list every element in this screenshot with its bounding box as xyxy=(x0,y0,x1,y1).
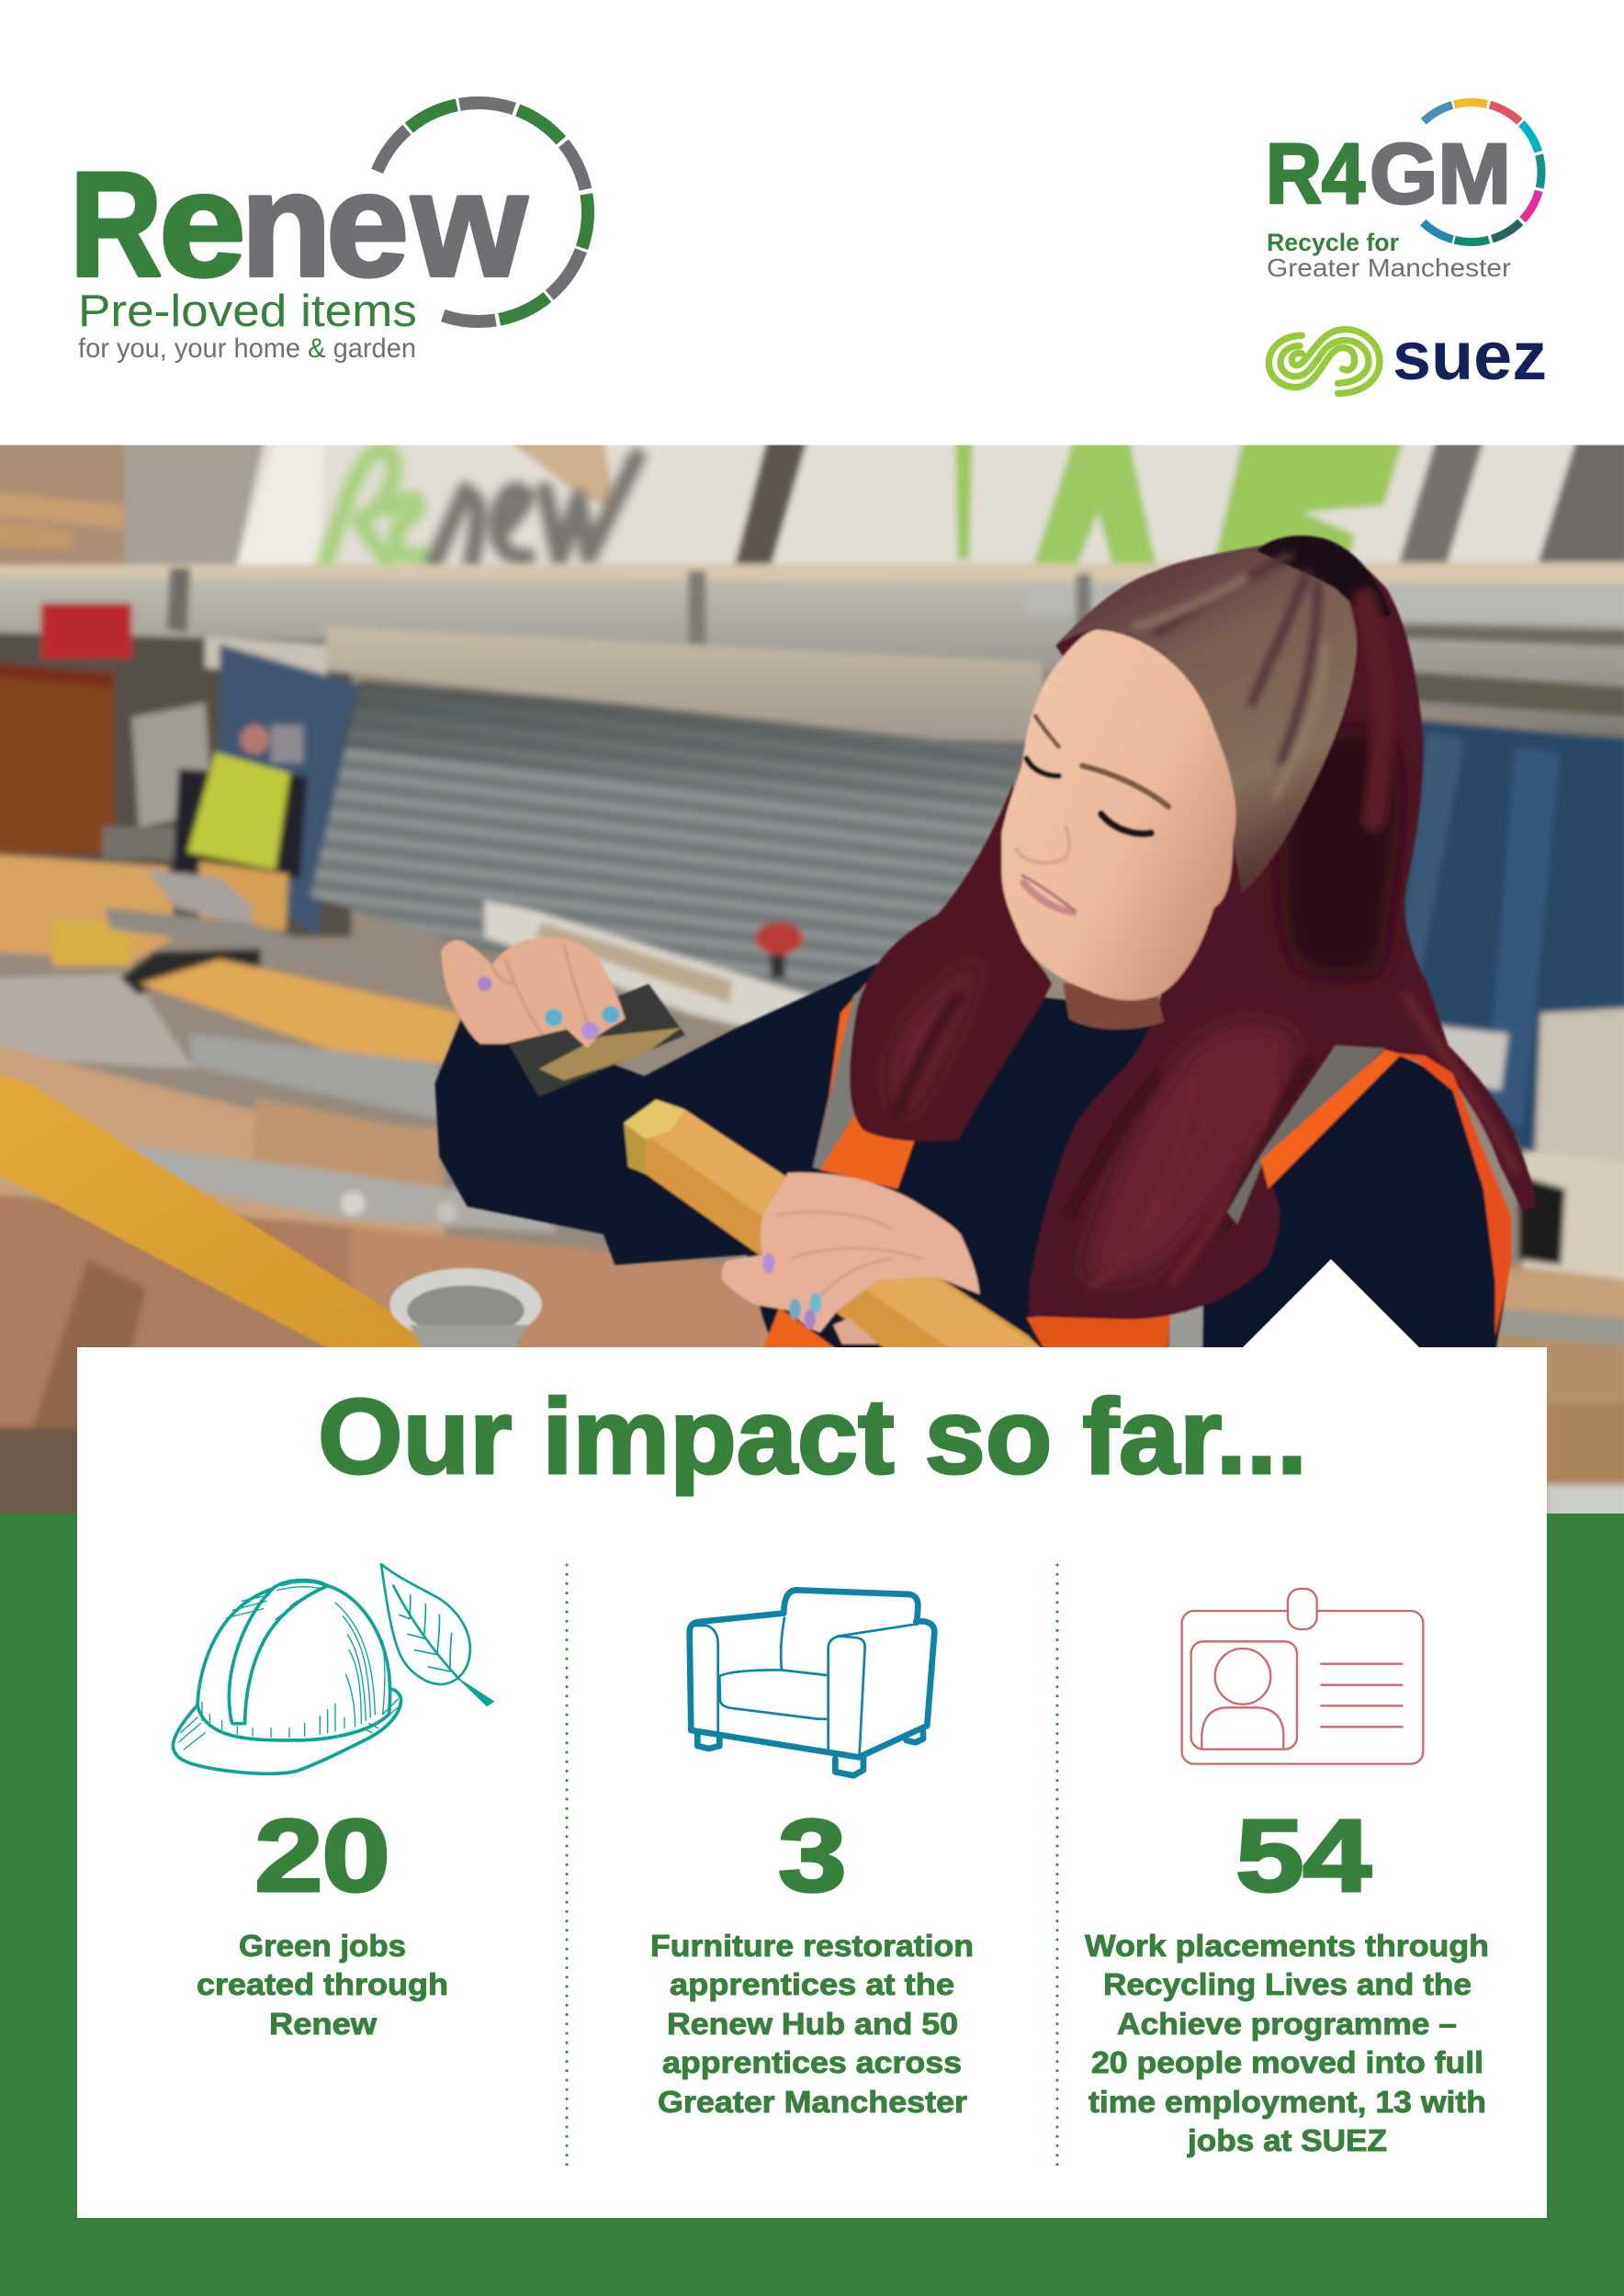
timber stick xyxy=(624,1099,1043,1350)
text: apprentices description: apprentices across xyxy=(662,2045,962,2079)
tagline: Pre-loved items: Pre-loved items xyxy=(78,287,417,336)
text: green jobs description: Renew xyxy=(269,2007,377,2041)
scraper with sawdust xyxy=(507,984,685,1097)
blue right wall xyxy=(1404,716,1624,1155)
column dividers xyxy=(567,1565,1057,2169)
hood xyxy=(327,626,1043,742)
right crates xyxy=(1494,1262,1624,1530)
wordmark: Renew xyxy=(70,141,528,308)
text: apprentices description xyxy=(650,1929,974,2119)
text: work placements description xyxy=(1085,1929,1489,2157)
text: work placements description: Recycling Lives and the xyxy=(1103,1967,1472,2001)
wordmark: suez: suez xyxy=(1393,318,1547,394)
text: work placements description: Achieve programme – xyxy=(1117,2007,1457,2041)
wordmark: Renew: R xyxy=(70,141,163,308)
long hair, main xyxy=(1029,538,1536,1319)
text: apprentices description: Furniture restoration xyxy=(650,1929,974,1963)
text: green jobs description: Green jobs xyxy=(239,1929,406,1963)
panel: green base band xyxy=(0,1514,1624,2296)
stat: 54: 54 xyxy=(1235,1799,1371,1913)
photo background: blurred workshop xyxy=(0,432,1624,1530)
icon: ID badge xyxy=(1182,1589,1423,1764)
logo ring: Renew segmented circle xyxy=(324,58,633,366)
text: Recycle for: Recycle for xyxy=(1267,229,1399,256)
text: work placements description: Work placements through xyxy=(1085,1929,1489,1963)
photo subject: woman in sweatshirt and vest xyxy=(434,535,1536,1355)
hair shadow and highlights xyxy=(891,728,1400,1278)
text: green jobs description: created through xyxy=(197,1967,448,2001)
text: work placements description: jobs at SUEZ xyxy=(1187,2123,1387,2157)
photo: apprentice sanding wood in workshop xyxy=(0,432,1624,1530)
facial features xyxy=(1016,716,1168,912)
wordmark: Renew: e xyxy=(159,142,246,308)
column: apprentices xyxy=(650,1590,974,2119)
machine with red knob xyxy=(485,900,820,1037)
icon: hard hat and leaf xyxy=(173,1564,493,1773)
text: Greater Manchester: Greater Manchester xyxy=(1267,253,1511,282)
column: work placements xyxy=(1085,1589,1489,2157)
logo: SUEZ xyxy=(1269,318,1547,394)
extraction pipe xyxy=(0,562,1624,742)
text: apprentices description: Renew Hub and 50 xyxy=(667,2007,958,2041)
blurred banner lettering strokes xyxy=(325,448,637,564)
wooden benches left xyxy=(0,853,175,959)
face xyxy=(1001,630,1236,1000)
stat: 20: 20 xyxy=(254,1799,390,1913)
long hair, left lock xyxy=(850,783,1052,1142)
logo: Renew xyxy=(70,58,633,366)
logo ring: R4GM coloured segments xyxy=(1373,73,1570,271)
text: apprentices description: apprentices at the xyxy=(670,1967,954,2001)
panel: white impact card with notch xyxy=(77,1259,1547,2218)
text: work placements description: 20 people moved into full xyxy=(1091,2045,1483,2079)
column: green jobs xyxy=(173,1564,493,2041)
neck xyxy=(1063,981,1164,1030)
clutter under pipe xyxy=(0,633,352,937)
text: green jobs description xyxy=(197,1929,448,2041)
text: apprentices description: Greater Manchester xyxy=(658,2085,967,2119)
wordmark: R4GM: R4 xyxy=(1266,126,1365,221)
tagline: for you, your home & garden: for you, your home & garden xyxy=(78,333,416,364)
foreground timber crates xyxy=(0,1042,446,1259)
logo: R4GM xyxy=(1266,73,1570,282)
wordmark: R4GM xyxy=(1266,126,1511,221)
crown hair strands xyxy=(1135,557,1382,820)
sweatshirt xyxy=(434,937,1511,1355)
left hand holding scraper xyxy=(441,938,626,1048)
wordmark: R4GM: GM xyxy=(1370,126,1511,221)
safety vest left xyxy=(762,981,917,1347)
crown of hair xyxy=(1055,539,1357,893)
stat: 3: 3 xyxy=(778,1799,847,1913)
roller shutter xyxy=(310,688,1025,1003)
safety vest bottom xyxy=(1025,1313,1172,1347)
heading: Our impact so far: Our impact so far... xyxy=(318,1377,1307,1496)
text: work placements description: time employment, 13 with xyxy=(1088,2085,1486,2119)
hair tie and top of ponytail xyxy=(1257,535,1391,617)
wordmark: Renew: new xyxy=(241,141,528,308)
icon: armchair xyxy=(690,1590,934,1775)
orange and grey shoulder strap xyxy=(1227,1045,1511,1337)
photo foreground: timber beam and tin xyxy=(0,1074,542,1355)
icon: SUEZ swirl xyxy=(1269,330,1380,393)
right hand gripping stick xyxy=(722,1173,980,1333)
